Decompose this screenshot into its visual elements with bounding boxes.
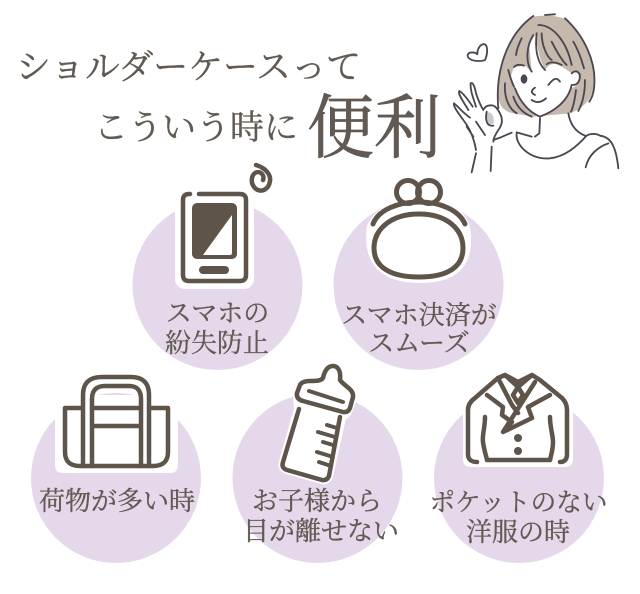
panel: clothes without pockets bbox=[430, 370, 608, 563]
woman head and body bbox=[498, 14, 618, 168]
title: 便利 bbox=[307, 91, 441, 168]
label: スマホの bbox=[166, 299, 269, 328]
panel: smartphone payment bbox=[334, 180, 504, 370]
panel: cannot take eyes off children bbox=[232, 365, 402, 563]
panel: cannot take eyes off children: 目が離せない bbox=[243, 517, 399, 546]
icon: bag bbox=[55, 377, 178, 473]
label: スマホ決済が bbox=[341, 301, 497, 330]
panel: clothes without pockets: 洋服の時 bbox=[466, 518, 570, 547]
icon: jacket bbox=[463, 370, 573, 467]
label: 荷物が多い時 bbox=[39, 487, 195, 516]
panel: smartphone payment: スムーズ bbox=[368, 329, 470, 358]
illustration: woman with OK sign bbox=[454, 14, 618, 172]
OK hand bbox=[454, 83, 512, 172]
icon: smartphone bbox=[175, 165, 270, 289]
icon: heart bbox=[468, 44, 487, 61]
title: こういう時に bbox=[94, 109, 298, 147]
label: お子様から bbox=[252, 487, 382, 516]
title bbox=[16, 48, 441, 168]
panel: phone loss prevention: 紛失防止 bbox=[165, 329, 269, 358]
title: ショルダーケースって bbox=[16, 48, 361, 87]
panel: phone loss prevention bbox=[132, 165, 302, 370]
panel: lots of luggage bbox=[31, 377, 201, 563]
icon: coin purse bbox=[366, 180, 471, 283]
icon: baby bottle bbox=[282, 365, 353, 480]
label: ポケットのない bbox=[430, 488, 608, 517]
